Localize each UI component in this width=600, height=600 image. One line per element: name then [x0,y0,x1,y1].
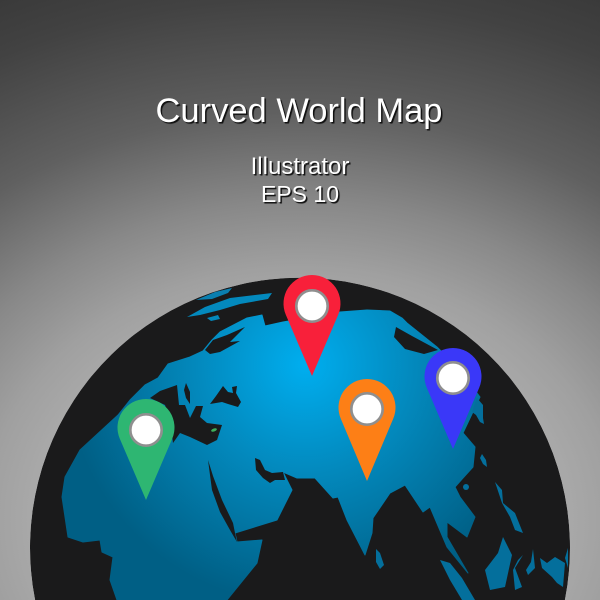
Moluccas [526,549,535,575]
pin: red [284,275,340,376]
Japan [473,400,484,424]
Arctic islands [187,288,272,321]
inland seas [150,327,438,542]
globe [30,278,570,600]
Persian Gulf [255,458,285,483]
Black Sea and Caspian [210,386,241,407]
Sumatra [440,560,475,600]
pin: blue [424,348,482,449]
Red Sea [208,460,237,542]
Taiwan [463,484,469,490]
New Guinea [540,557,565,587]
Gulf of Tonkin ring [460,482,470,492]
Baltic sea [205,327,245,354]
Sulawesi [513,555,523,590]
Asia-Pacific islands [376,398,568,600]
title: Curved World Map [156,92,442,130]
Borneo [485,537,512,590]
Adriatic sea [184,383,190,404]
pin: green [118,399,174,500]
Mediterranean sea [150,385,222,445]
pin: orange [338,379,396,481]
Cyprus [211,428,217,432]
globe disc [30,278,570,600]
landmass: Eurasia and Africa [62,310,480,600]
subtitle: EPS 10: EPS 10 [261,181,339,207]
Sri Lanka [376,549,384,569]
Sea of Okhotsk [394,327,438,354]
Philippines [495,482,523,533]
subtitle: Illustrator: Illustrator [251,153,349,180]
